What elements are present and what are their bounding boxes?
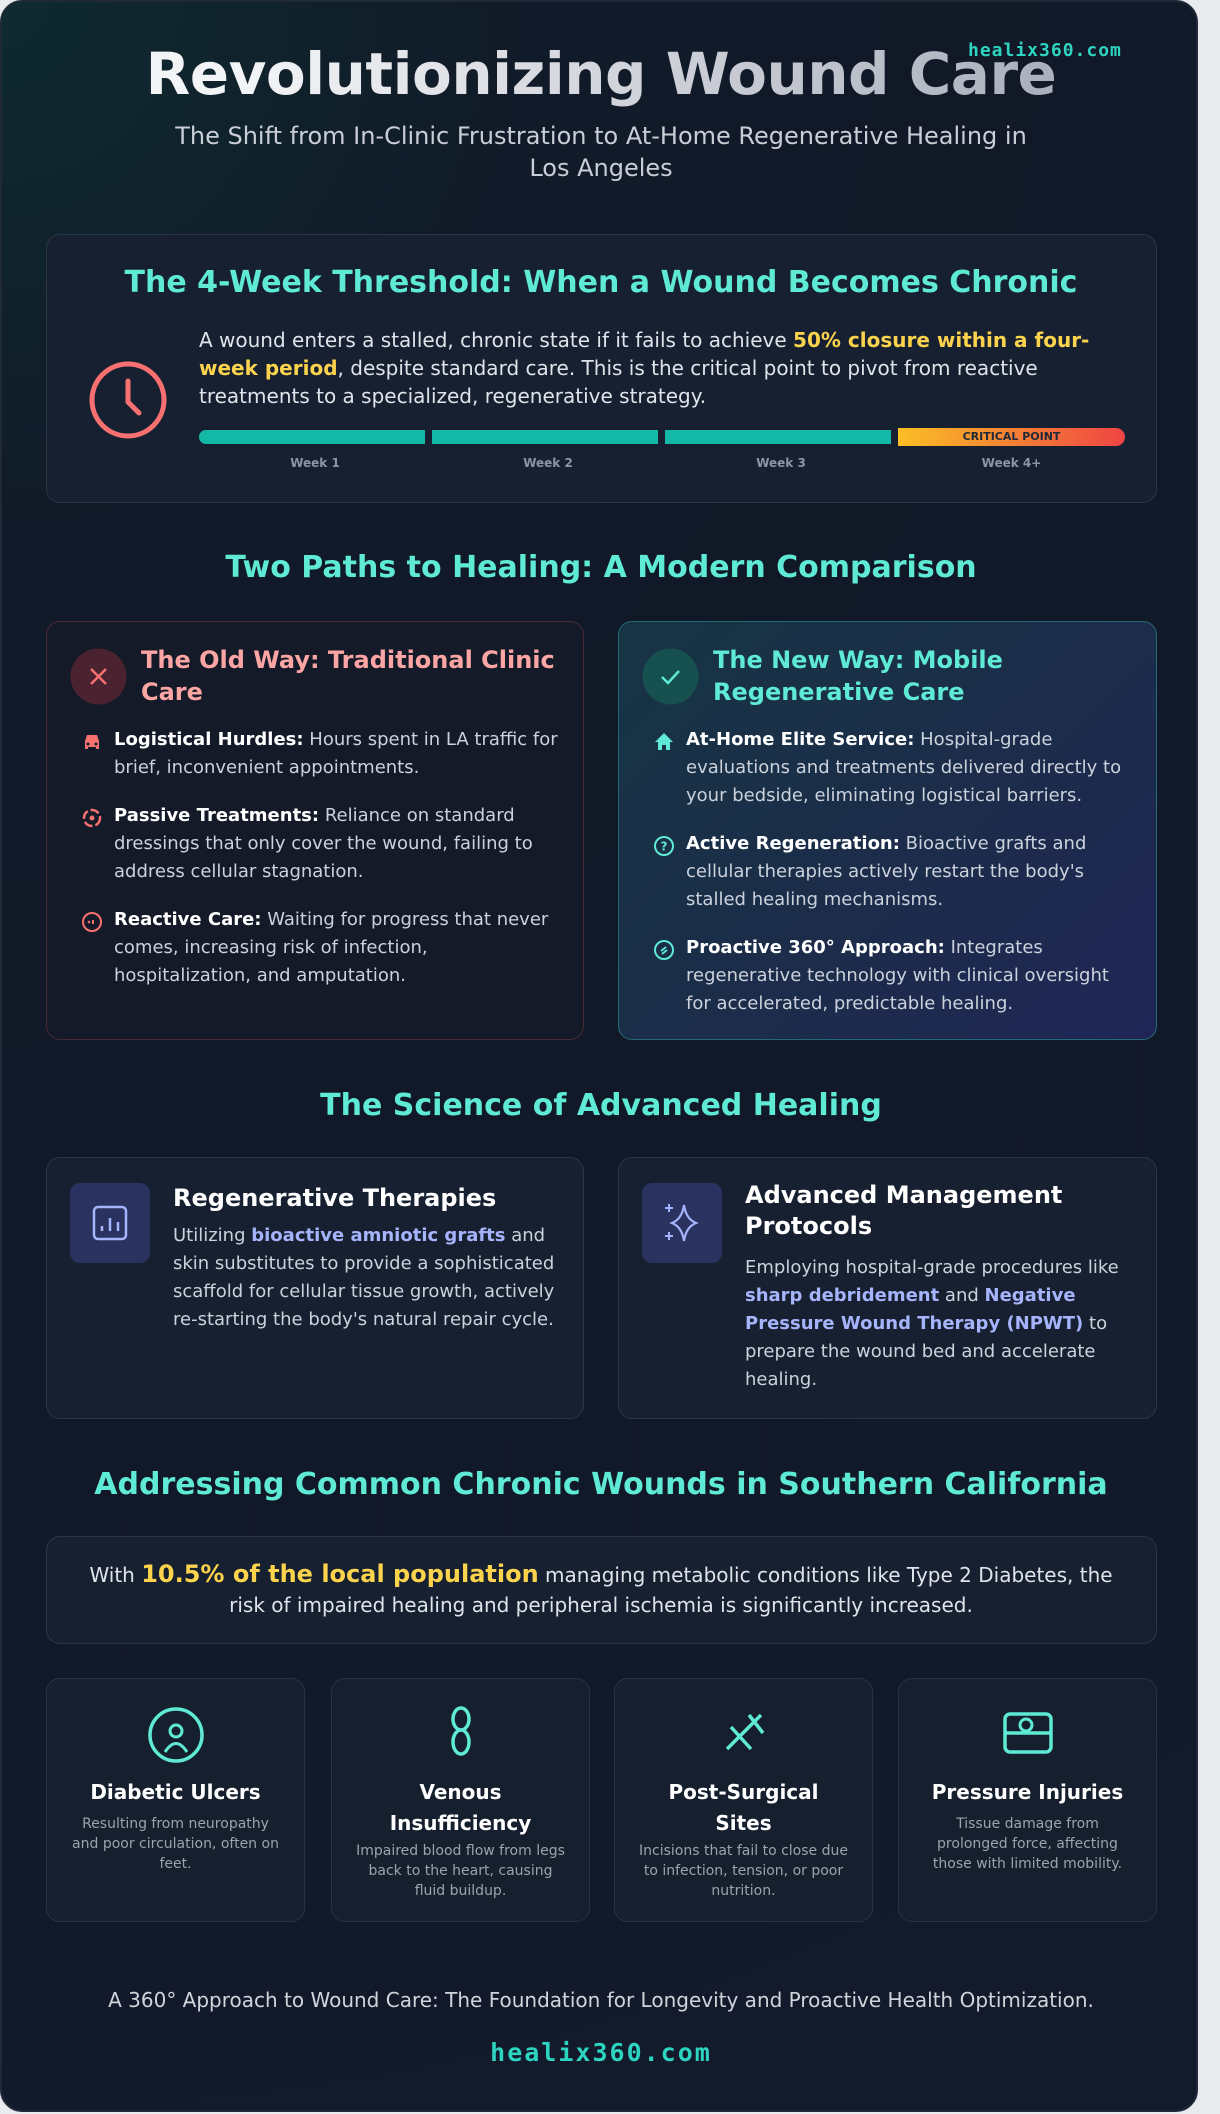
- new way heading: The New Way: Mobile Regenerative Care: [713, 646, 1003, 706]
- card: venous insufficiency: [331, 1678, 590, 1922]
- footer tagline: A 360° Approach to Wound Care: The Foundation for Longevity and Proactive Health Optimization.: [108, 1988, 1094, 2012]
- advanced text: Employing hospital-grade procedures like sharp debridement and Negative Pressure Wound Therapy (NPWT) to prepare the wound bed and accelerate healing.: [745, 1257, 1119, 1390]
- panel: new way: [618, 621, 1157, 1040]
- card: diabetic ulcers: Resulting from neuropathy and poor circulation, often on feet.: [72, 1816, 279, 1872]
- advanced heading: Advanced Management Protocols: [745, 1181, 1062, 1240]
- card: pressure injuries: Tissue damage from prolonged force, affecting those with limited mobility.: [933, 1816, 1122, 1872]
- card: pressure injuries: Pressure Injuries: [932, 1780, 1123, 1804]
- item: reactive care: Reactive Care: Waiting for progress that never comes, increasing risk of infection, hospitalization, and amputation.: [114, 909, 548, 986]
- site url top right: healix360.com: [968, 40, 1122, 61]
- icon: x circle: [70, 648, 126, 704]
- panel: regenerative therapies: [46, 1157, 584, 1419]
- regenerative text: Utilizing bioactive amniotic grafts and skin substitutes to provide a sophisticated scaffold for cellular tissue growth, actively re-starting the body's natural repair cycle.: [173, 1225, 554, 1330]
- footer url: healix360.com: [490, 2038, 712, 2067]
- card: venous insufficiency: Impaired blood flow from legs back to the heart, causing fluid buildup.: [356, 1843, 565, 1899]
- timeline bar: CRITICAL POINT: [963, 430, 1060, 443]
- timeline bar: [199, 428, 1125, 470]
- item: passive treatments: Passive Treatments: Reliance on standard dressings that only cover the wound, failing to address cellular stagnation.: [114, 805, 533, 882]
- icon: person circle: [148, 1707, 204, 1763]
- subtitle: The Shift from In-Clinic Frustration to At-Home Regenerative Healing in Los Angeles: [175, 122, 1027, 182]
- card: post-surgical: Post-Surgical Sites: [668, 1780, 819, 1835]
- icon: chart box: [70, 1183, 150, 1263]
- card: venous insufficiency: Venous Insufficiency: [390, 1780, 531, 1835]
- panel: new way: ?: [661, 840, 668, 854]
- icon: crossed scissors: [726, 1714, 764, 1750]
- item: logistical hurdles: Logistical Hurdles: Hours spent in LA traffic for brief, inconvenient appointments.: [114, 729, 558, 778]
- card: diabetic ulcers: Diabetic Ulcers: [90, 1780, 261, 1804]
- heading: two paths: Two Paths to Healing: A Modern Comparison: [225, 550, 977, 585]
- old way heading: The Old Way: Traditional Clinic Care: [141, 646, 555, 706]
- card: post-surgical: [614, 1678, 873, 1922]
- icon: figure eight: [451, 1706, 471, 1756]
- item: proactive 360: Proactive 360° Approach: Integrates regenerative technology with clinical oversight for accelerated, predictable healing.: [686, 937, 1109, 1014]
- icon: sparkle box: [642, 1183, 722, 1263]
- card: diabetic ulcers: [46, 1678, 305, 1922]
- timeline bar: Week 1: [290, 456, 340, 470]
- threshold heading: The 4-Week Threshold: When a Wound Becomes Chronic: [125, 265, 1077, 300]
- callout: population stat: With 10.5% of the local population managing metabolic conditions like Type 2 Diabetes, the risk of impaired healing and peripheral ischemia is significantly increased.: [89, 1560, 1113, 1617]
- icon: bed frame: [1003, 1712, 1053, 1754]
- regenerative heading: Regenerative Therapies: [173, 1184, 496, 1212]
- heading: science: The Science of Advanced Healing: [320, 1088, 882, 1123]
- card: pressure injuries: [898, 1678, 1157, 1922]
- card: post-surgical: Incisions that fail to close due to infection, tension, or poor nutrition.: [639, 1843, 848, 1899]
- icon: clock: [90, 362, 166, 438]
- panel: old way: [46, 621, 584, 1040]
- timeline bar: Week 2: [523, 456, 573, 470]
- callout: population stat: [46, 1536, 1157, 1644]
- item: at-home service: At-Home Elite Service: Hospital-grade evaluations and treatments delivered directly to your bedside, eliminating logistical barriers.: [686, 729, 1121, 806]
- heading: southern california: Addressing Common Chronic Wounds in Southern California: [94, 1467, 1108, 1502]
- title: Revolutionizing Wound Care: [146, 40, 1056, 108]
- item: active regeneration: Active Regeneration: Bioactive grafts and cellular therapies actively restart the body's stalled healing mechanisms.: [686, 833, 1086, 910]
- icon: check circle: [642, 648, 698, 704]
- panel: advanced management: [618, 1157, 1157, 1419]
- panel: 4-week threshold: [46, 234, 1157, 503]
- threshold text: A wound enters a stalled, chronic state if it fails to achieve 50% closure within a four-week period, despite standard care. This is the critical point to pivot from reactive treatments to a specialized, regenerative strategy.: [199, 328, 1089, 408]
- timeline bar: Week 4+: [982, 456, 1041, 470]
- timeline bar: Week 3: [756, 456, 806, 470]
